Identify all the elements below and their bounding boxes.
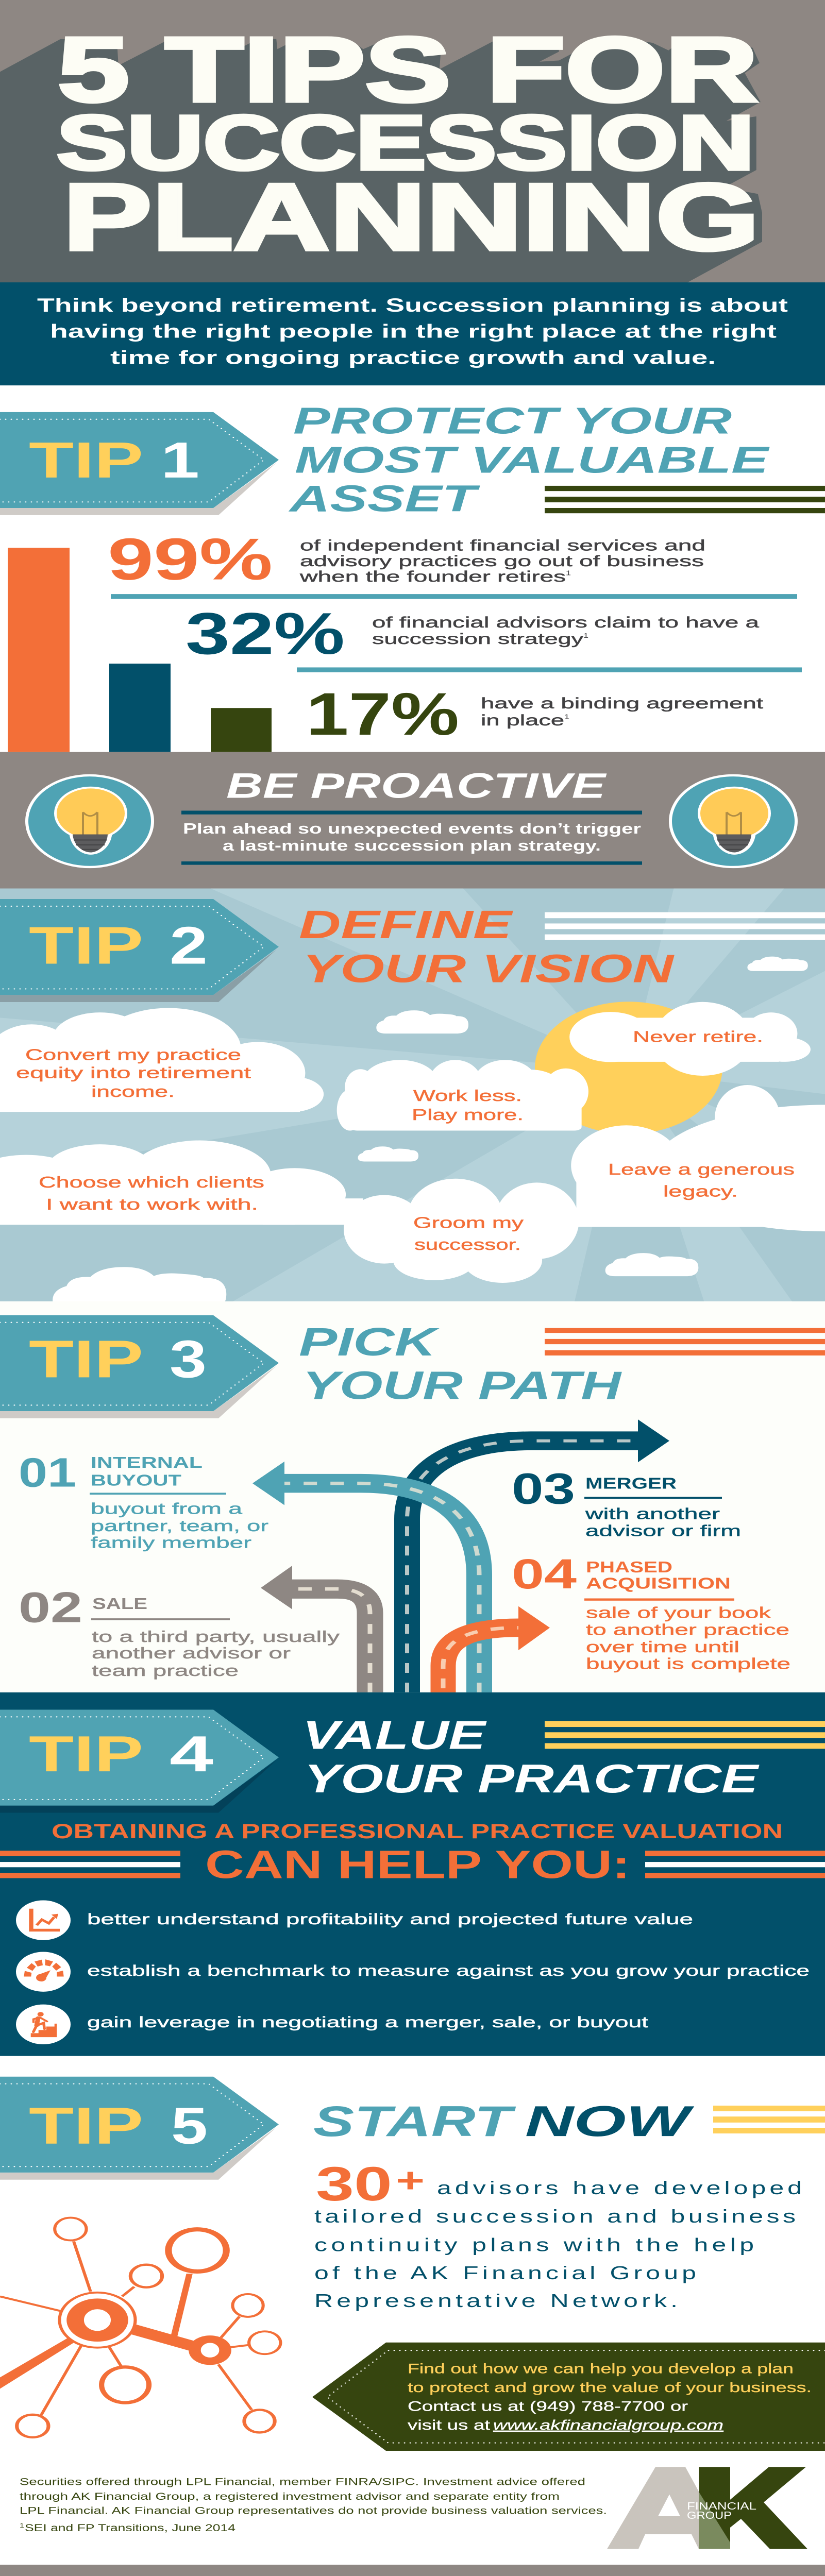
stat 99 percent: when the founder retires	[299, 568, 566, 585]
tip 1 banner	[0, 412, 279, 515]
panel: tip 3	[0, 1301, 825, 1692]
bar chart	[8, 548, 272, 752]
cloud: never retire: Never retire.	[633, 1028, 763, 1045]
stat 99 percent: 99%	[108, 527, 273, 592]
stat 99 percent	[108, 527, 705, 592]
stat 32 percent: of financial advisors claim to have a	[372, 614, 759, 631]
panel: title header	[0, 0, 825, 287]
be proactive text: a last-minute succession plan strategy.	[223, 838, 601, 854]
path 01 internal buyout: buyout from a	[91, 1500, 243, 1517]
tip 2 banner: 2	[170, 916, 208, 975]
arrow: phased acquisition road	[443, 1606, 550, 1692]
stat 30 plus advisors: tailored succession and business	[314, 2206, 796, 2227]
cloud: groom successor: Groom my	[413, 1214, 524, 1231]
tip 1 heading	[288, 400, 770, 519]
network graphic	[0, 2218, 280, 2437]
panel: tip 5	[0, 2077, 825, 2549]
path 02 sale: 02	[19, 1584, 82, 1632]
path 04 phased acquisition: buyout is complete	[586, 1655, 790, 1672]
disclosure text: 1	[20, 2522, 24, 2529]
tip 5 heading	[313, 2097, 695, 2145]
arrow: internal buyout road	[252, 1462, 479, 1692]
cloud: choose clients: Choose which clients	[39, 1173, 264, 1191]
tip 2 banner	[0, 899, 279, 1002]
panel: tip 2 sky	[0, 889, 825, 1311]
cloud: work less play more: Play more.	[412, 1106, 524, 1124]
contact callout: www.akfinancialgroup.com	[493, 2417, 723, 2433]
stat 32 percent: succession strategy	[372, 631, 583, 648]
icon: person climbing stairs	[16, 2005, 71, 2044]
valuation heading: OBTAINING A PROFESSIONAL PRACTICE VALUATION	[52, 1820, 783, 1843]
tip 5 banner: TIP	[29, 2097, 143, 2155]
path 02 sale: to a third party, usually	[92, 1628, 340, 1646]
tip 3 heading	[299, 1320, 622, 1408]
path 04 phased acquisition	[512, 1550, 790, 1672]
tip 3 banner: TIP	[29, 1330, 143, 1389]
icon: growth chart	[16, 1901, 71, 1940]
path 04 phased acquisition: over time until	[586, 1638, 739, 1656]
benefit text 1: better understand profitability and projected future value	[87, 1911, 693, 1928]
cloud: leave a legacy	[571, 1085, 825, 1231]
stat 17 percent	[306, 680, 763, 748]
valuation heading	[52, 1820, 783, 1887]
benefit text 3: gain leverage in negotiating a merger, sale, or buyout	[87, 2014, 648, 2031]
stat 17 percent: in place	[481, 711, 564, 728]
disclosure text: Securities offered through LPL Financial, member FINRA/SIPC. Investment advice offered	[20, 2477, 585, 2487]
cloud: never retire	[569, 1002, 811, 1076]
be proactive text: Plan ahead so unexpected events don’t trigger	[183, 821, 641, 837]
stat 99 percent: 1	[566, 570, 571, 577]
cloud: choose clients	[0, 1140, 363, 1225]
path 01 internal buyout: partner, team, or	[91, 1517, 268, 1534]
cloud: work less play more	[337, 1060, 588, 1131]
tip 5 heading: START	[313, 2097, 516, 2145]
icon: light bulb left	[27, 775, 153, 867]
intro text: time for ongoing practice growth and value.	[110, 347, 716, 368]
path 02 sale: SALE	[92, 1595, 147, 1613]
path 04 phased acquisition: to another practice	[586, 1621, 789, 1638]
disclosure text: SEI and FP Transitions, June 2014	[25, 2522, 235, 2534]
icon: gauge	[16, 1952, 71, 1992]
stat 99 percent: of independent financial services and	[300, 537, 705, 554]
path 04 phased acquisition: ACQUISITION	[586, 1574, 731, 1592]
tip 5 heading: NOW	[525, 2097, 695, 2145]
tip 2 heading	[299, 903, 675, 991]
path 03 merger: 03	[512, 1464, 575, 1513]
logo: AK Financial Group: GROUP	[687, 2510, 732, 2521]
disclosure text	[20, 2477, 607, 2534]
tip 1 heading: ASSET	[288, 478, 481, 519]
panel: tip 1	[0, 400, 825, 752]
panel: intro band	[0, 282, 825, 385]
disclosure text: LPL Financial. AK Financial Group representatives do not provide business valuation services.	[20, 2505, 607, 2517]
stat 30 plus advisors: continuity plans with the help	[314, 2234, 754, 2256]
stat 30 plus advisors: 30	[316, 2157, 392, 2211]
tip 2 heading: YOUR VISION	[302, 947, 675, 991]
arrow: merger road	[407, 1419, 669, 1692]
cloud: leave a legacy: legacy.	[663, 1182, 738, 1200]
path 04 phased acquisition: 04	[512, 1550, 577, 1597]
logo: AK Financial Group: FINANCIAL	[687, 2500, 756, 2512]
tip 5 banner: 5	[171, 2097, 208, 2155]
intro text: having the right people in the right place at the right	[50, 321, 777, 342]
stat 99 percent: advisory practices go out of business	[300, 552, 704, 570]
tip 1 heading: PROTECT YOUR	[293, 400, 732, 442]
stat 30 plus advisors: advisors have developed	[437, 2178, 802, 2199]
stat 17 percent: 17%	[306, 680, 459, 748]
path 03 merger: advisor or firm	[585, 1522, 741, 1539]
tip 3 heading: PICK	[299, 1320, 440, 1364]
contact callout: to protect and grow the value of your business.	[408, 2380, 812, 2395]
benefit text 2: establish a benchmark to measure against as you grow your practice	[87, 1962, 810, 1979]
contact callout: Contact us at (949) 788-7700 or	[408, 2398, 688, 2414]
path 01 internal buyout: 01	[19, 1450, 76, 1496]
panel: be proactive	[0, 752, 825, 889]
sun	[535, 1002, 722, 1134]
path 01 internal buyout: INTERNAL	[91, 1454, 203, 1471]
title text: PLANNING	[63, 164, 760, 270]
tip 4 banner	[0, 1709, 279, 1812]
path 03 merger	[512, 1464, 741, 1539]
intro text: Think beyond retirement. Succession planning is about	[37, 295, 788, 316]
tip 3 heading: YOUR PATH	[302, 1364, 622, 1408]
intro text	[37, 295, 788, 368]
path 02 sale: team practice	[92, 1662, 239, 1679]
path 04 phased acquisition: PHASED	[586, 1558, 672, 1576]
disclosure text: through AK Financial Group, a registered investment advisor and separate entity from	[20, 2491, 560, 2502]
tip 3 banner: 3	[170, 1330, 207, 1389]
cloud: choose clients: I want to work with.	[46, 1195, 258, 1213]
footer bar	[0, 2565, 825, 2576]
stat 30 plus advisors: +	[396, 2161, 425, 2200]
cloud: groom successor: successor.	[414, 1235, 521, 1253]
tip 4 heading	[302, 1713, 760, 1801]
title text	[57, 19, 760, 270]
cloud: convert practice equity: equity into retirement	[16, 1064, 251, 1081]
tip 1 banner: TIP	[29, 432, 143, 489]
tip 4 banner: 4	[170, 1726, 213, 1783]
icon: light bulb right	[670, 775, 796, 867]
contact callout: Find out how we can help you develop a plan	[408, 2361, 794, 2376]
stat 30 plus advisors	[314, 2157, 802, 2312]
be proactive text	[183, 821, 641, 854]
path 03 merger: with another	[585, 1505, 720, 1522]
contact callout: visit us at	[408, 2417, 490, 2433]
tip 1 banner: 1	[161, 432, 199, 489]
path 04 phased acquisition: sale of your book	[586, 1604, 771, 1621]
tip 4 banner: TIP	[29, 1726, 143, 1783]
tip 2 banner: TIP	[29, 916, 143, 975]
path 02 sale	[19, 1584, 340, 1679]
path 01 internal buyout	[19, 1450, 268, 1551]
stat 32 percent	[186, 601, 759, 667]
tip 3 banner	[0, 1315, 279, 1418]
logo: AK Financial Group	[607, 2467, 807, 2549]
cloud: leave a legacy: Leave a generous	[608, 1160, 795, 1178]
stat 30 plus advisors: of the AK Financial Group	[314, 2263, 696, 2284]
tip 4 heading: YOUR PRACTICE	[304, 1756, 760, 1801]
path 01 internal buyout: BUYOUT	[91, 1471, 182, 1489]
cloud: work less play more: Work less.	[413, 1087, 522, 1105]
tip 5 banner	[0, 2077, 279, 2180]
stat 32 percent: 32%	[186, 601, 345, 667]
contact callout	[312, 2343, 825, 2451]
stat 17 percent: have a binding agreement	[481, 694, 763, 712]
cloud: convert practice equity: income.	[91, 1082, 175, 1100]
title text: 5 TIPS FOR	[58, 19, 758, 121]
tip 1 heading: MOST VALUABLE	[295, 439, 770, 481]
tip 4 heading: VALUE	[302, 1713, 487, 1757]
path 02 sale: another advisor or	[92, 1645, 291, 1662]
valuation heading: CAN HELP YOU:	[205, 1842, 630, 1887]
cloud: groom successor	[344, 1179, 579, 1283]
stat 30 plus advisors: Representative Network.	[314, 2291, 678, 2312]
be proactive heading: BE PROACTIVE	[226, 767, 607, 806]
cloud: convert practice equity	[0, 1008, 324, 1112]
stat 17 percent: 1	[564, 714, 569, 721]
long shadow behind title	[0, 38, 762, 287]
small background clouds	[53, 957, 808, 1311]
tip 2 heading: DEFINE	[299, 903, 513, 947]
path 03 merger: MERGER	[585, 1475, 677, 1492]
path 01 internal buyout: family member	[91, 1534, 251, 1551]
arrow: sale road	[261, 1566, 370, 1692]
title text: SUCCESSION	[57, 100, 754, 186]
cloud: convert practice equity: Convert my practice	[25, 1046, 241, 1063]
stat 32 percent: 1	[583, 632, 588, 639]
panel: tip 4	[0, 1692, 825, 2056]
